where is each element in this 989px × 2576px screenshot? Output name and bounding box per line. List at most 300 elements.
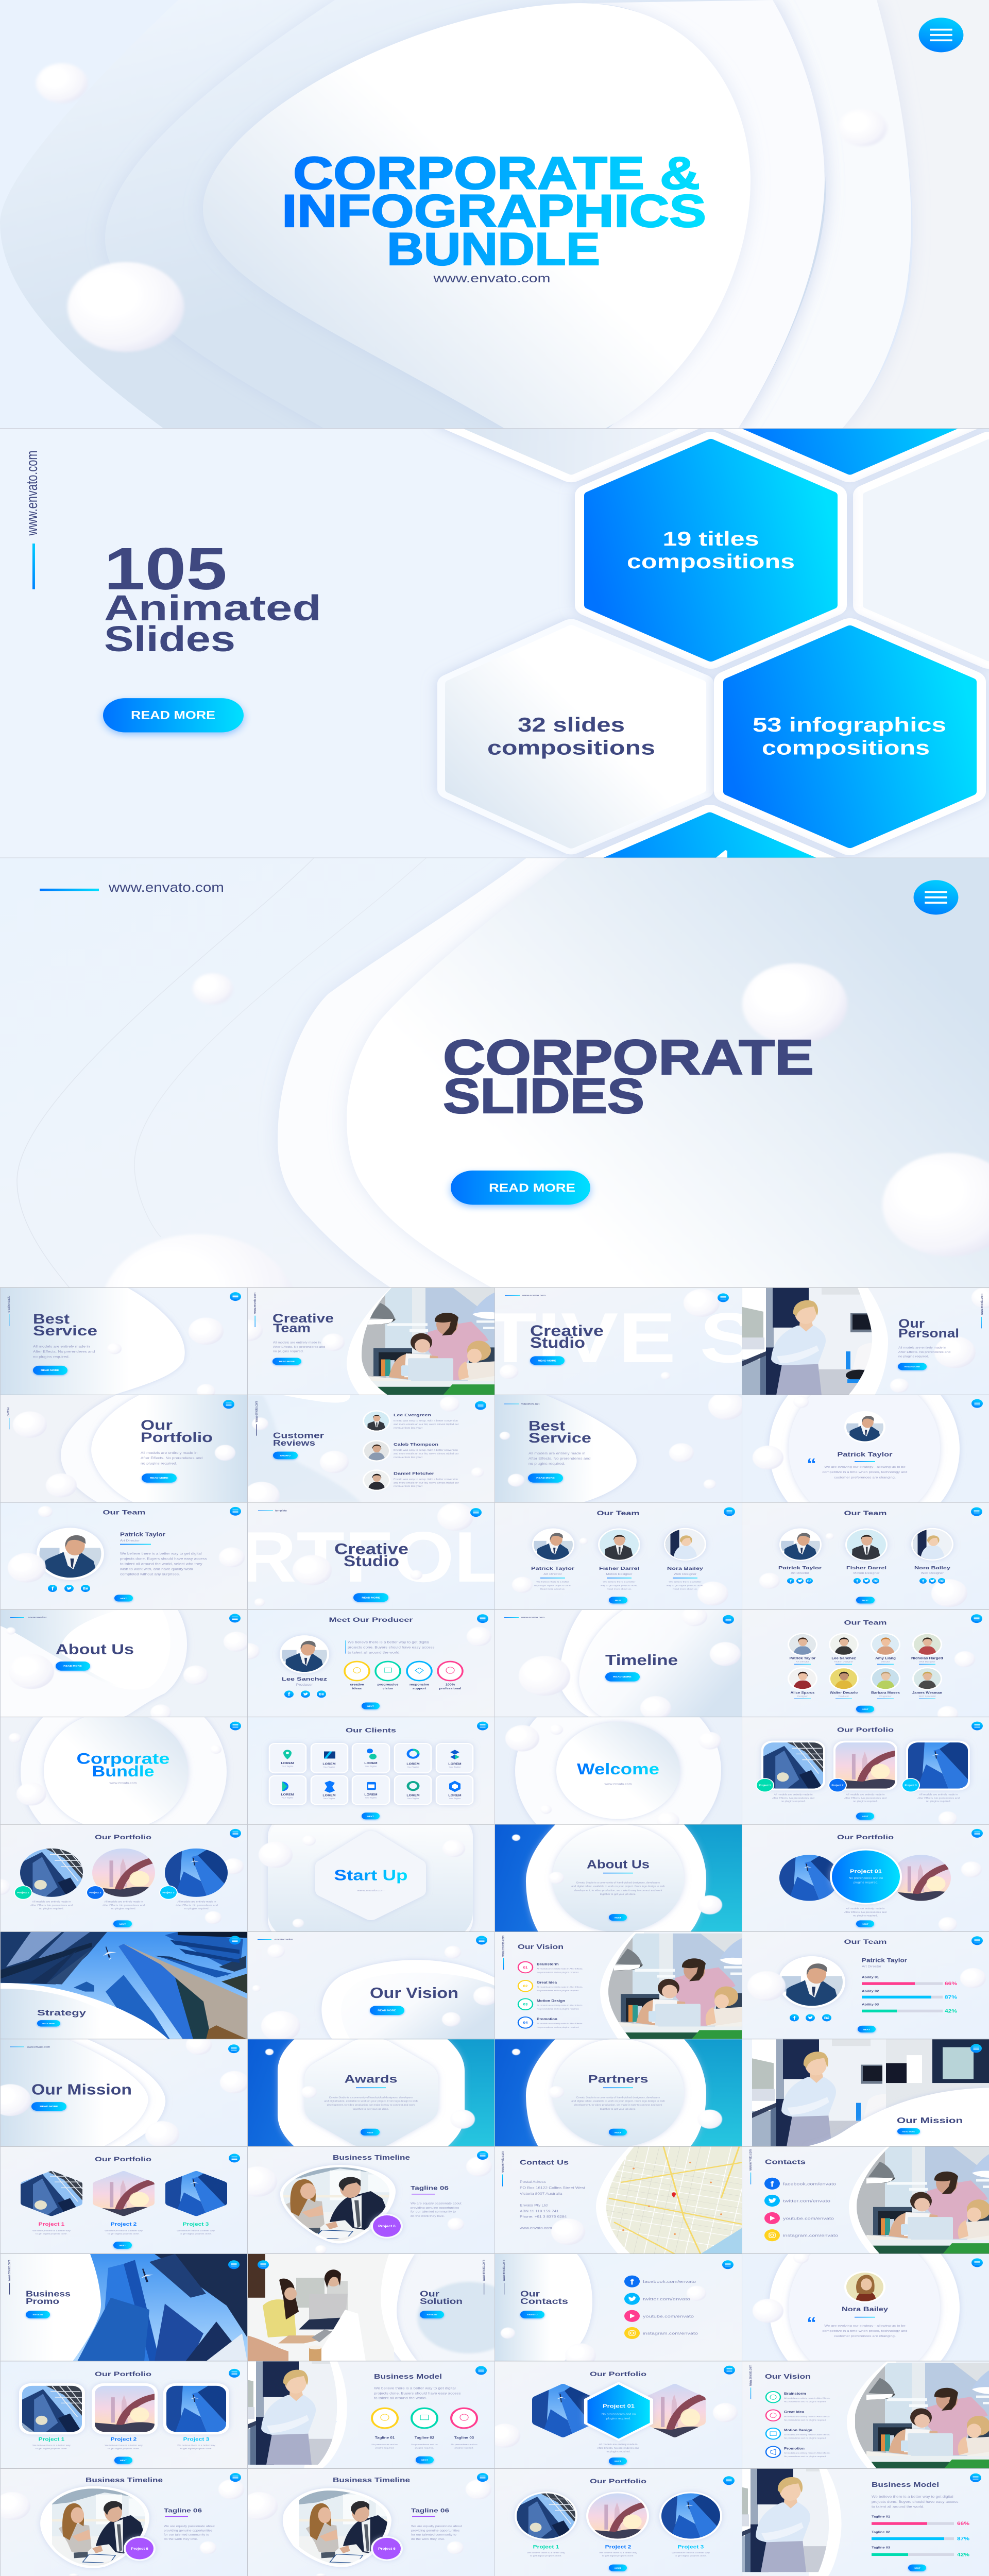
header [504, 1616, 545, 1619]
review: Daniel Fletcher: Envato was easy to setup. With a better conversion [394, 1478, 458, 1481]
project text: to get digital projects done. [36, 2233, 67, 2235]
menu [718, 1293, 729, 1302]
paragraph: All models are entirely made in [141, 1451, 198, 1455]
button [897, 2128, 920, 2134]
list item 04: 04 [523, 2021, 527, 2025]
project oval 3: Project 3 [678, 2545, 704, 2550]
menu [475, 2366, 487, 2375]
button next: NEXT [120, 1923, 126, 1925]
list item: Motion Design: Motion Design [784, 2429, 812, 2432]
title [898, 1316, 959, 1340]
project circle 1 [14, 1849, 83, 1900]
spheres [489, 2403, 738, 2448]
paragraph [273, 1342, 325, 1353]
member: Nora Bailey: Bē [940, 1580, 944, 1583]
project text [772, 1793, 960, 1803]
white curve [806, 2088, 989, 2147]
project badge [371, 2536, 403, 2561]
button next [856, 1597, 875, 1603]
button next [858, 2026, 876, 2032]
paragraph: and digital talent, available to work on your project. From logo design to web [571, 2100, 665, 2103]
slide: Our Portfolio circles [0, 1824, 247, 1932]
project badge [124, 2536, 156, 2561]
title [273, 1431, 324, 1447]
menu [723, 2476, 735, 2485]
vertical label: portfolio [7, 1407, 10, 1416]
ability 03 bar: 42% [945, 2009, 958, 2014]
header: www.envato.com [522, 1294, 546, 1297]
paragraph: no plugins required. [898, 1355, 929, 1358]
title: Meet Our Producer [329, 1616, 413, 1623]
title: Studio [530, 1334, 585, 1351]
spheres [512, 1538, 728, 1605]
project circle 2 [86, 1849, 155, 1900]
photo: meeting [247, 2254, 394, 2361]
header [258, 1510, 287, 1512]
slide: Our Portfolio hexagons [0, 2147, 247, 2254]
slide: Our Vision list [494, 1932, 747, 2041]
header [504, 1403, 540, 1405]
review: Caleb Thompson: and more emails on our list, we've almost tripled our [394, 1453, 459, 1455]
paragraph: After Effects. No prerenderes and [273, 1346, 325, 1349]
paragraph: do the work they love. [411, 2538, 445, 2541]
slide: Welcome [494, 1683, 742, 1858]
project text: no plugins required. [39, 1907, 64, 1910]
socials [790, 2014, 831, 2021]
button next: NEXT [421, 2459, 428, 2461]
member: Fisher Darrel [598, 1529, 640, 1590]
member: Fisher Darrel: Bē [874, 1580, 878, 1583]
heading: Animated [104, 588, 321, 628]
vertical label: www.envato.com [254, 1401, 259, 1422]
sphere front [747, 1971, 786, 2001]
title: Our Mission [897, 2116, 963, 2125]
ability 01 bar: 66% [945, 1981, 958, 1987]
slide: Contact Us [494, 2147, 752, 2254]
header [10, 1616, 47, 1619]
list item: Brainstorm: Brainstorm [784, 2392, 806, 2396]
slide: Our Team single [0, 1502, 247, 1610]
url: www.envato.com [604, 1783, 632, 1786]
review: Daniel Fletcher [363, 1469, 459, 1491]
menu [724, 2366, 735, 2375]
white band [304, 2361, 347, 2469]
title: Our [520, 2290, 540, 2298]
slide: Our Portfolio center hex [489, 2361, 742, 2469]
project text: We believe there is a better way [177, 2229, 215, 2232]
title: Contacts [520, 2297, 568, 2306]
member: Fisher Darrel: way to get digital projects done. [601, 1584, 638, 1586]
list item 03: All models are entirely made in After Effects. [537, 2004, 583, 2006]
menu [230, 1292, 241, 1301]
slide: Our Portfolio cards [742, 1717, 989, 1826]
contact: youtube [624, 2310, 694, 2322]
spheres [759, 1533, 967, 1607]
title: Our Vision [518, 1943, 564, 1951]
title: Our Portfolio [95, 2156, 151, 2163]
backdrop layer: right [842, 0, 989, 429]
contact: twitter [624, 2293, 690, 2305]
paragraph: no plugins required. [273, 1350, 304, 1353]
title: Service [528, 1430, 591, 1446]
review: Lee Evergreen: Lee Evergreen [394, 1413, 431, 1417]
ability 03 bar [862, 2003, 958, 2014]
url: www.envato.com [356, 1889, 384, 1892]
address: Envato Pty Ltd [520, 2203, 548, 2207]
project text: no plugins required. [184, 1907, 209, 1910]
bar: tagline 03: 42% [957, 2552, 970, 2557]
project badge: Project 6 [131, 2547, 148, 2551]
paragraph: together to get your job done. [600, 2108, 636, 2110]
contact: youtube [764, 2212, 834, 2224]
project text: All models are entirely made in [846, 1907, 885, 1910]
ring 03: Tagline 03 [454, 2436, 474, 2439]
slide: Our Portfolio highlight [742, 1824, 989, 1932]
title: Service [33, 1323, 97, 1338]
title [334, 1541, 408, 1570]
menu [970, 2044, 982, 2053]
project text: We believe there is a better way [672, 2552, 710, 2554]
list item: Promotion: All models are entirely made in After Effects. [784, 2452, 830, 2454]
button [528, 1473, 563, 1483]
project card 2: Project 2 [111, 2437, 137, 2442]
team roles: Art Director [796, 1660, 809, 1663]
project text: to get digital projects done. [602, 2555, 634, 2557]
button: READ MORE [613, 1675, 632, 1679]
title [26, 2290, 71, 2306]
photo: team [603, 1934, 747, 2041]
menu [230, 2473, 241, 2482]
name: Nora Bailey [842, 2306, 889, 2313]
button: READ MORE [41, 1369, 59, 1372]
project text [32, 2444, 216, 2450]
main white blob [203, 3, 751, 429]
menu [970, 2473, 981, 2482]
project text [844, 1907, 886, 1917]
button [353, 1593, 388, 1602]
paragraph: to talent all around the world. [374, 2396, 427, 2400]
slide: Creative Studio [484, 1288, 757, 1395]
contact: twitter [764, 2195, 830, 2207]
menu [477, 2473, 488, 2482]
title [520, 2290, 568, 2306]
menu [229, 1936, 241, 1945]
button [142, 1473, 177, 1483]
vertical label: www.envato.com [501, 2151, 505, 2173]
button [605, 1672, 640, 1682]
quote text: competitive in a time when prices, technology and [822, 1471, 908, 1474]
spheres back [960, 1968, 986, 1988]
name: Patrick Taylor [837, 1451, 892, 1458]
menu [971, 1614, 982, 1623]
slide: Creative Studio portfolio word [240, 1502, 502, 1610]
sphere [939, 1811, 957, 1826]
team names: Barbara Moses [871, 1691, 900, 1694]
vertical label [8, 1296, 11, 1326]
project text: to get digital projects done. [36, 2447, 67, 2450]
member: Nora Bailey: way to get digital projects done. [667, 1584, 704, 1586]
list item 01: Brainstorm [537, 1962, 559, 1966]
contact: facebook: f [630, 2278, 634, 2286]
title: INFOGRAPHICS [282, 185, 706, 236]
slide: Our Portfolio [0, 1395, 247, 1502]
contact: instagram: instagram.com/envato [643, 2331, 698, 2335]
heading [104, 536, 321, 659]
slide: Customer Reviews [244, 1395, 494, 1510]
button next: NEXT [863, 2028, 870, 2030]
title: Business Timeline [333, 2477, 410, 2484]
project hex 1: Project 1 [39, 2222, 64, 2227]
list item 04: No prerenderes and no plugins required. [537, 2026, 579, 2028]
vertical label [7, 1407, 10, 1429]
member: Nora Bailey: Nora Bailey [914, 1566, 951, 1571]
paragraph: After Effects. No prerenderes and [528, 1456, 590, 1461]
quote text [822, 2325, 908, 2338]
review: Caleb Thompson: revenue from last year! [394, 1456, 422, 1459]
client names: LOREM [406, 1794, 420, 1797]
button [56, 1662, 90, 1671]
list item 03: 03 [523, 2003, 527, 2006]
button next: NEXT [615, 2131, 621, 2133]
title: Bundle [92, 1763, 154, 1780]
title: Best [33, 1311, 70, 1327]
header [10, 2046, 50, 2048]
member: Nora Bailey: Web Designer [921, 1572, 944, 1575]
ring labels: vision [383, 1687, 393, 1690]
ring labels: progressive [378, 1683, 399, 1686]
review: Lee Evergreen: and more emails on our list, we've almost tripled our [394, 1423, 459, 1426]
spheres [939, 1861, 982, 1931]
menu [475, 1401, 486, 1410]
project text: to get digital projects done. [675, 2555, 707, 2557]
title [530, 1323, 604, 1351]
slide: Nora Bailey quote [742, 2218, 989, 2397]
team roles: Motion Designer [834, 1660, 854, 1663]
heading: 105 [104, 536, 227, 602]
button next: NEXT [914, 2567, 920, 2569]
name: Art Director [862, 1965, 882, 1968]
title: Partners [588, 2073, 649, 2085]
bar: tagline 03 [872, 2546, 970, 2557]
project text: After Effects. No prerenderes and [176, 1904, 218, 1907]
ring 01: Tagline 01 [375, 2436, 395, 2439]
project text: We believe there is a better way [177, 2444, 216, 2447]
paragraph: to talent all around the world, select who they [120, 1562, 202, 1566]
quote text: We are evolving our strategy - allowing us to be [824, 2325, 906, 2328]
menu [223, 1400, 234, 1409]
tagline [164, 2507, 202, 2517]
backdrop curves [17, 858, 989, 1288]
paragraph: All models are entirely made in [33, 1344, 90, 1348]
project text: All models are entirely made in [919, 1793, 958, 1796]
white band [847, 2361, 896, 2469]
title: Business [26, 2290, 71, 2298]
spheres [512, 1835, 722, 1914]
contact: youtube: youtube.com/envato [783, 2216, 834, 2221]
button: READ MORE [63, 1665, 82, 1668]
white blob [526, 1824, 706, 1932]
review: Caleb Thompson [363, 1440, 459, 1462]
ring 01: No prerenderes and no [371, 2444, 398, 2446]
project text: We believe there is a better way [599, 2552, 638, 2554]
hexagon backgrounds [450, 257, 989, 1030]
paragraph [164, 2526, 215, 2541]
member: Fisher Darrel [845, 1529, 888, 1584]
button next: NEXT [121, 1597, 127, 1600]
ring labels: creative [350, 1683, 364, 1686]
menu button [914, 880, 958, 914]
client names: LOREM [448, 1794, 462, 1797]
bar: tagline 01 [872, 2515, 970, 2527]
project oval 2 [586, 2492, 649, 2550]
title: Portfolio [141, 1430, 213, 1445]
section: hero title [0, 0, 963, 429]
bar: tagline 03: Tagline 03 [872, 2546, 890, 2549]
slide: Our Portfolio ovals [494, 2469, 742, 2576]
vertical label: www.envato.com [748, 2365, 753, 2386]
vertical label [980, 1294, 984, 1328]
ability 03 bar: Ability 03 [862, 2003, 879, 2006]
button next: NEXT [615, 2460, 621, 2462]
list item: Promotion [766, 2446, 830, 2458]
client names: LOREM [364, 1793, 378, 1797]
button: READ MORE [902, 2131, 915, 2132]
slide: Our Mission photo [752, 2039, 989, 2147]
spheres [512, 2049, 722, 2129]
list item 01: 01 [523, 1966, 527, 1970]
paragraph: wish to work with, and have quality work [120, 1567, 193, 1571]
title: Studio [344, 1553, 399, 1570]
menu [477, 2151, 488, 2160]
address: Victoria 8007 Australia [520, 2192, 562, 2196]
spheres [937, 1651, 975, 1722]
title: Timeline [605, 1652, 678, 1669]
project oval 1: Project 1 [533, 2545, 559, 2550]
project text: All models are entirely made in [32, 1901, 71, 1903]
button: read more [103, 698, 244, 733]
member: Nora Bailey: We believe there is a better [669, 1581, 702, 1583]
hexagon: 19 titles: compositions [627, 551, 795, 572]
project hex 3 [165, 2171, 227, 2227]
header: url with bar: www.envato.com [108, 880, 224, 895]
project text: After Effects. No prerenderes and [844, 1911, 886, 1913]
spheres [500, 1392, 744, 1489]
name: Lee Sanchez [282, 1676, 327, 1682]
project text: We believe there is a better way [105, 2444, 143, 2447]
hexagon: bottom [588, 816, 831, 1030]
member: Patrick Taylor: Patrick Taylor [778, 1566, 822, 1571]
menu [971, 1722, 983, 1731]
bar: tagline 02 [872, 2531, 970, 2541]
paragraph: We believe there is a better way to get digital [120, 1552, 202, 1555]
address [519, 2180, 585, 2230]
paragraph: for our talented community to [411, 2534, 457, 2536]
quote: projects done. Buyers should have easy access [348, 1646, 435, 1649]
paragraph: Envato Studio is a community of hand-picked designers, developers [576, 2096, 660, 2099]
button next [416, 2456, 434, 2464]
button [370, 2006, 404, 2015]
spheres [0, 2035, 249, 2147]
client cards [269, 1743, 473, 1805]
list item: Brainstorm [766, 2392, 830, 2403]
portrait [844, 2271, 885, 2303]
url: www.envato.com [109, 1782, 137, 1785]
menu [477, 1614, 488, 1623]
photo: skyscrapers [0, 1932, 247, 2039]
title: Our Vision [765, 2373, 811, 2381]
paragraph [120, 1552, 207, 1576]
menu [229, 2154, 240, 2162]
paragraph: no plugins required. [33, 1354, 70, 1359]
list item 01: No prerenderes and no plugins required. [537, 1971, 579, 1973]
client names: LOREM [281, 1793, 294, 1797]
socials: f [793, 2015, 795, 2021]
button next [609, 2129, 627, 2136]
title [282, 147, 706, 275]
bar: tagline 02: Tagline 02 [872, 2531, 890, 2534]
header: envatomarket [275, 1939, 294, 1941]
member: Nora Bailey [664, 1528, 706, 1590]
title: Our Portfolio [590, 2370, 646, 2378]
paragraph [33, 1344, 95, 1359]
title: Our Portfolio [590, 2478, 646, 2485]
vertical label: www.envato.com [980, 1294, 984, 1315]
button: READ MORE [42, 2023, 55, 2025]
socials: Bē [319, 1692, 324, 1696]
project hex 1 [21, 2171, 82, 2227]
quote: We believe there is a better way to get digital [348, 1640, 430, 1644]
list item 04: All models are entirely made in After Effects. [537, 2022, 583, 2025]
menu button [919, 18, 963, 52]
paragraph: After Effects. No prerenderes and [33, 1349, 95, 1353]
list item 03: Motion Design [537, 1999, 565, 2003]
client taglines: Your Tagline [449, 1798, 461, 1800]
slide: Our Vision [247, 1932, 498, 2041]
decorative spheres [36, 63, 887, 352]
title: Our [898, 1316, 925, 1330]
hexagon: 32 slides: compositions [487, 737, 655, 759]
slide: Best Service [0, 1288, 247, 1398]
contact: facebook: facebook.com/envato [783, 2181, 836, 2186]
title: Promo [26, 2297, 59, 2306]
list item 01: All models are entirely made in After Effects. [537, 1968, 583, 1970]
team roles: Director [881, 1660, 890, 1663]
center hex [585, 2383, 652, 2440]
button [31, 2102, 66, 2111]
project card 2 [92, 2383, 158, 2442]
contact: youtube: youtube.com/envato [643, 2314, 694, 2318]
list item 04: Promotion [537, 2018, 557, 2021]
spheres [235, 1319, 345, 1351]
title: Contacts [765, 2158, 806, 2166]
member: Fisher Darrel: Fisher Darrel [599, 1566, 639, 1571]
spheres [500, 1289, 720, 1379]
white band [347, 1288, 391, 1395]
client taglines: Your Tagline [407, 1798, 419, 1800]
ability 02 bar: 87% [945, 1995, 958, 2000]
vertical label: www.envato.com [501, 1936, 505, 1957]
tagline [411, 2185, 449, 2195]
title: Business Model [374, 2373, 442, 2381]
project text: We believe there is a better way [527, 2552, 566, 2554]
menu [971, 1399, 983, 1408]
list item 03 [518, 1998, 583, 2010]
menu [723, 1615, 734, 1624]
contact: facebook: f [771, 2180, 774, 2189]
title: Business Model [872, 2481, 939, 2489]
slide: Our Mission [0, 2035, 249, 2147]
button next [908, 2565, 926, 2571]
